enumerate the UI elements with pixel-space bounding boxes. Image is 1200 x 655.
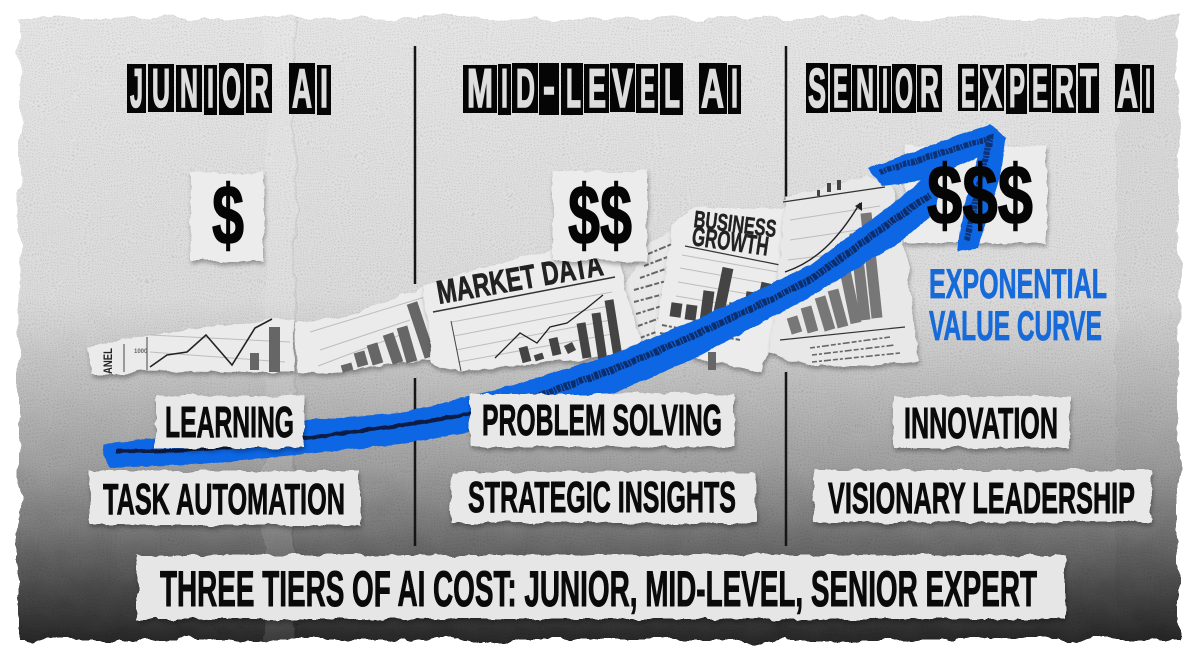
heading: Junior AI: I [320, 57, 328, 119]
heading: Senior Expert AI: X [982, 57, 1002, 119]
label: Innovation [893, 396, 1070, 448]
newspaper collage [88, 176, 918, 374]
clipping: left line chart: 1000 [134, 349, 148, 355]
heading: Senior Expert AI: E [1032, 57, 1048, 119]
heading: Junior AI: N [180, 57, 198, 119]
label: Problem Solving: PROBLEM SOLVING [482, 396, 722, 445]
heading: Mid-Level AI: E [640, 57, 655, 119]
heading: Junior AI: I [207, 57, 214, 119]
heading: Senior Expert AI: T [1080, 57, 1097, 119]
heading: Senior Expert AI: N [856, 57, 874, 119]
label: Task Automation [90, 471, 360, 525]
dollar signs: $$$: $$$ [927, 148, 1033, 242]
label: Strategic Insights: STRATEGIC INSIGHTS [468, 473, 736, 522]
dollar slip: $ [191, 168, 264, 262]
dollar slip: $: $ [212, 168, 244, 262]
heading: Mid-Level AI: I [501, 57, 508, 119]
heading: Mid-Level AI [463, 55, 741, 119]
heading: Senior Expert AI: E [961, 57, 975, 119]
heading: Senior Expert AI: O [895, 57, 913, 119]
clipping: right bar chart [770, 176, 918, 366]
clipping: left line chart: ANEL [101, 348, 115, 374]
dollar slip: $$: $$ [568, 168, 632, 262]
clipping: business growth: BUSINESS [692, 206, 778, 243]
clipping: text column [625, 228, 675, 350]
label: Strategic Insights [451, 472, 756, 523]
dollar slip: $$$ [904, 146, 1047, 243]
heading: Mid-Level AI: M [467, 57, 493, 119]
heading: Junior AI: A [292, 57, 312, 119]
heading: Senior Expert AI: R [920, 57, 939, 119]
heading: Junior AI: U [152, 57, 170, 119]
heading: Mid-Level AI: L [664, 57, 680, 119]
clipping: rising bars [295, 282, 445, 373]
heading: Mid-Level AI: D [516, 57, 535, 119]
clipping: market data: MARKET DATA [434, 245, 606, 311]
clipping: left line chart [88, 318, 294, 374]
heading: Mid-Level AI: I [731, 57, 738, 119]
blue exponential arrow [103, 124, 1006, 468]
label: Innovation: INNOVATION [904, 399, 1058, 448]
heading: Senior Expert AI: A [1117, 57, 1138, 119]
label: Learning [155, 396, 304, 448]
value curve caption [929, 260, 1107, 349]
label: Problem Solving [470, 394, 734, 447]
heading: Mid-Level AI: A [701, 57, 724, 119]
heading: Junior AI: O [222, 57, 241, 119]
heading: Mid-Level AI: - [543, 55, 555, 117]
label: Task Automation: TASK AUTOMATION [103, 475, 345, 524]
clipping: business growth [655, 206, 795, 372]
clipping: business growth: GROWTH [690, 221, 771, 262]
heading: Junior AI [127, 57, 331, 119]
clipping: market data [423, 245, 642, 372]
label: Learning: LEARNING [165, 398, 294, 447]
heading: Senior Expert AI [806, 57, 1154, 119]
heading: Senior Expert AI: I [1145, 57, 1151, 119]
heading: Mid-Level AI: V [612, 57, 633, 119]
column divider left [414, 46, 416, 546]
heading: Senior Expert AI: I [882, 57, 888, 119]
column divider right [785, 46, 787, 546]
heading: Senior Expert AI: P [1009, 57, 1025, 119]
heading: Mid-Level AI: L [566, 57, 581, 119]
heading: Junior AI: R [250, 57, 269, 119]
heading: Junior AI: J [130, 57, 143, 119]
heading: Senior Expert AI: E [833, 57, 848, 119]
heading: Senior Expert AI: R [1055, 57, 1074, 119]
heading: Senior Expert AI: S [808, 57, 826, 119]
heading: Mid-Level AI: E [588, 57, 606, 119]
